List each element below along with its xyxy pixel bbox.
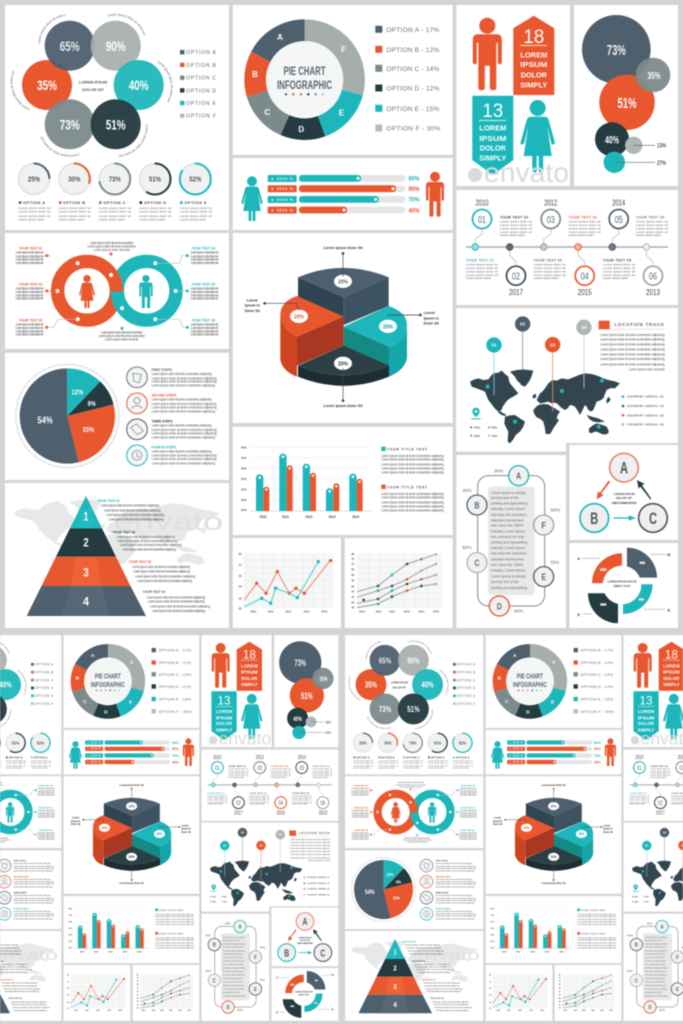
bottom-left repeated sheet [0,631,338,1021]
top full-size sheet of infographics [0,0,678,628]
bottom-right repeated sheet [341,631,683,1021]
